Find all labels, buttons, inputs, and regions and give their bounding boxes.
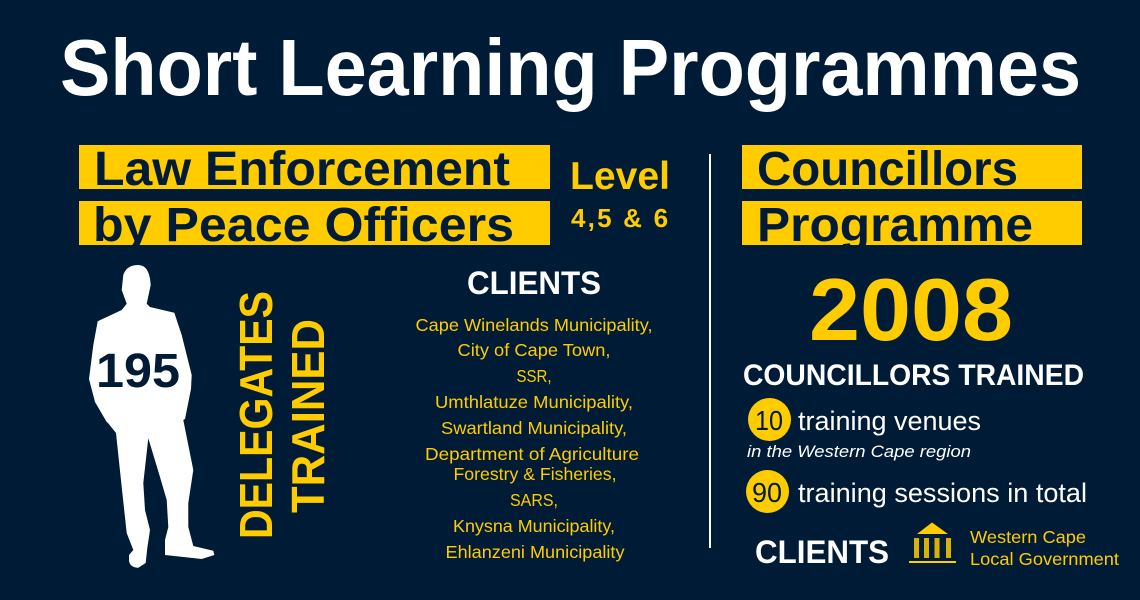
client: western cape local government: Local Government (970, 549, 1119, 569)
panel: councillors programme (742, 143, 1119, 570)
heading: law enforcement line 1: Law Enforcement (94, 143, 510, 196)
stat: training sessions: 90 (752, 477, 782, 508)
clients list: Department of Agriculture (425, 444, 639, 464)
clients heading: CLIENTS (467, 265, 601, 301)
clients list: City of Cape Town, (458, 340, 610, 360)
big number: 2008: 2008 (809, 260, 1013, 359)
clients list: Forestry & Fisheries, (454, 464, 616, 484)
stat: training venues: 10 (755, 405, 783, 436)
level label: Level (570, 155, 670, 198)
level label (570, 155, 670, 233)
clients list (416, 315, 652, 562)
heading: councillors line 1: Councillors (757, 143, 1018, 196)
clients heading: CLIENTS (755, 534, 889, 570)
client: western cape local government (970, 527, 1119, 569)
clients list: SSR, (516, 366, 552, 386)
councillors trained label: COUNCILLORS TRAINED (743, 359, 1084, 392)
stat: training venues: training venues (798, 406, 981, 436)
stat: training venues: in the Western Cape region (747, 442, 971, 461)
stat: training sessions: training sessions in total (798, 478, 1087, 508)
client: western cape local government: Western Cape (970, 527, 1086, 547)
clients list: Cape Winelands Municipality, (416, 315, 652, 335)
icon: government building (909, 522, 956, 563)
clients list: Ehlanzeni Municipality (446, 542, 625, 562)
level label: 4,5 & 6 (571, 203, 670, 233)
stat: training venues (747, 398, 981, 461)
panel: law enforcement programme (79, 143, 670, 568)
delegates trained rotated label (230, 291, 334, 539)
icon: standing man silhouette with delegate count: 195 (96, 345, 180, 398)
icon: standing man silhouette with delegate count (89, 265, 214, 568)
clients list: Knysna Municipality, (453, 516, 615, 536)
stat: training sessions (746, 470, 1087, 513)
title: Short Learning Programmes (60, 23, 1081, 112)
clients list: Swartland Municipality, (441, 418, 627, 438)
delegates trained rotated label: DELEGATES (230, 291, 282, 539)
heading: law enforcement line 2: by Peace Officers (93, 199, 514, 252)
delegates trained rotated label: TRAINED (282, 319, 334, 513)
heading: councillors line 2: Programme (757, 199, 1033, 252)
clients list: SARS, (510, 490, 558, 510)
clients list: Umthlatuze Municipality, (435, 392, 633, 412)
